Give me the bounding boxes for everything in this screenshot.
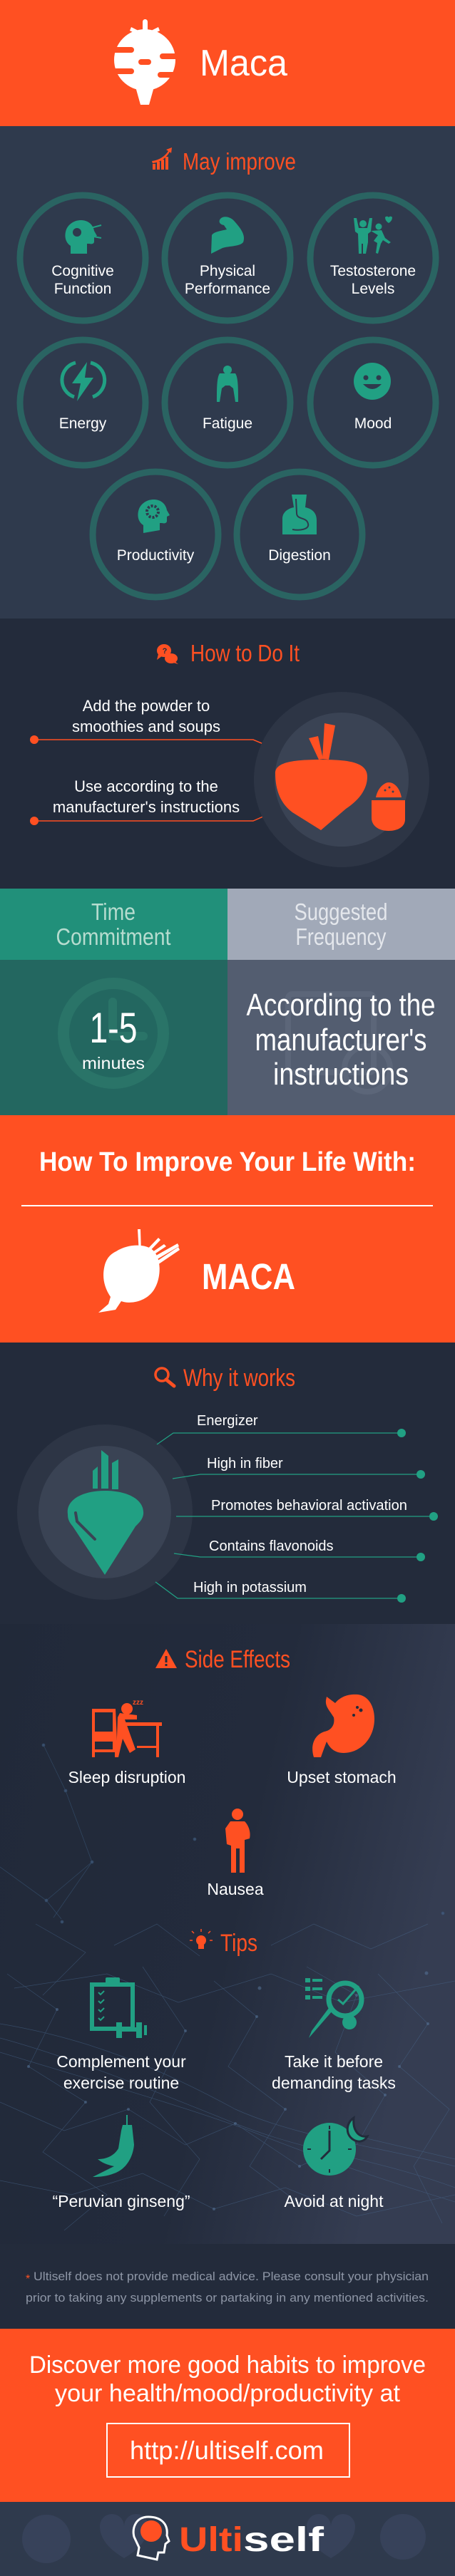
heading: may improve	[152, 148, 296, 175]
item: testosterone levels: Testosterone	[330, 263, 416, 279]
list: promotes behavioral activation: Promotes behavioral activation	[211, 1498, 407, 1514]
list: energizer	[157, 1413, 406, 1444]
panel: may improve	[0, 126, 455, 619]
panel: tips	[52, 1929, 396, 2210]
list: contains flavonoids: Contains flavonoids	[209, 1538, 334, 1554]
logo: ultiself	[133, 2517, 324, 2560]
icon: teal maca	[17, 1424, 193, 1600]
icon: sleep disruption: zzz	[133, 1699, 143, 1707]
heading: how to do it: How to Do It	[190, 640, 300, 666]
heading: tips: Tips	[220, 1930, 257, 1957]
label: upset stomach: Upset stomach	[287, 1768, 397, 1786]
disclaimer: *	[26, 2273, 30, 2285]
footer	[0, 2502, 455, 2576]
list: high in potassium	[155, 1580, 406, 1603]
label: complement: exercise routine	[63, 2074, 179, 2092]
item: productivity: Productivity	[117, 547, 195, 564]
disclaimer: Ultiself does not provide medical advice. Please consult your physician	[34, 2270, 429, 2283]
item: testosterone levels	[310, 195, 436, 321]
icon: clipboard	[90, 1977, 147, 2038]
panel: why it works	[0, 1343, 455, 1624]
value: 1-5 minutes: minutes	[82, 1054, 145, 1072]
heading: suggested frequency: Suggested	[294, 899, 388, 925]
label: peruvian ginseng: “Peruvian ginseng”	[52, 2192, 190, 2210]
item: fatigue: Fatigue	[203, 415, 252, 432]
list: promotes behavioral activation	[176, 1498, 438, 1521]
icon: calendar faint	[288, 994, 390, 1092]
item: physical performance: Physical	[200, 263, 255, 279]
title: Maca: Maca	[200, 43, 287, 84]
text: use according: Use according to the	[74, 777, 218, 795]
value: according	[247, 988, 435, 1092]
heading: why it works: Why it works	[183, 1365, 295, 1392]
item: physical performance	[165, 195, 290, 321]
button: url: http://ultiself.com	[130, 2436, 324, 2465]
disclaimer: prior to taking any supplements or partaking in any mentioned activities.	[26, 2292, 429, 2305]
item: cognitive function: Function	[54, 281, 111, 297]
list: energizer: Energizer	[197, 1413, 258, 1429]
label: take it before	[272, 2052, 396, 2092]
icon: magnifier checklist	[305, 1978, 362, 2038]
heading: how to improve: How To Improve Your Life With:	[39, 1147, 416, 1177]
item: productivity	[93, 472, 218, 597]
text: use according	[30, 777, 276, 825]
list: high in potassium: High in potassium	[193, 1580, 307, 1595]
heading: may improve: May improve	[183, 148, 296, 175]
text: discover more	[29, 2352, 426, 2407]
heading: how to do it: ?	[163, 647, 168, 656]
heading: tips	[190, 1929, 257, 1957]
panel: side effects and tips background	[0, 1624, 455, 2244]
value: according: instructions	[273, 1057, 409, 1092]
heading: how to do it	[157, 640, 300, 666]
panel: call to action	[0, 2329, 455, 2502]
panel: side effects	[68, 1646, 397, 1898]
list: contains flavonoids	[174, 1538, 425, 1561]
disclaimer	[0, 2244, 455, 2329]
heading: time commitment: Time	[91, 899, 136, 925]
list: high in fiber: High in fiber	[207, 1456, 283, 1471]
text: add the powder	[30, 697, 272, 748]
value: 1-5 minutes: 1-5	[90, 1004, 137, 1052]
icon: nausea	[225, 1809, 250, 1873]
list: high in fiber	[173, 1456, 425, 1479]
item: cognitive function	[20, 195, 145, 321]
panel: how to do it	[0, 619, 455, 889]
item: testosterone levels: Levels	[352, 281, 394, 297]
button: url	[107, 2424, 349, 2477]
icon: clock with moon	[303, 2118, 367, 2176]
item: fatigue	[165, 340, 290, 465]
icon: white beet	[98, 1229, 180, 1313]
icon: ginseng root	[93, 2115, 134, 2177]
heading: suggested frequency: Frequency	[295, 924, 387, 950]
label: take it before: Take it before	[285, 2052, 383, 2071]
item: digestion	[237, 472, 362, 597]
icon: maca header	[107, 19, 188, 105]
text: add the powder: Add the powder to	[83, 697, 210, 715]
heading: time commitment: Commitment	[56, 924, 171, 950]
icon: clock faint	[63, 983, 163, 1083]
label: complement: Complement your	[56, 2052, 186, 2071]
item: cognitive function: Cognitive	[51, 263, 114, 279]
label: complement	[56, 2052, 186, 2092]
item: physical performance: Performance	[185, 281, 270, 297]
item: energy	[20, 340, 145, 465]
logo: ultiself: Ulti	[179, 2521, 243, 2559]
label: sleep disruption: Sleep disruption	[68, 1768, 185, 1786]
logo: ultiself: self	[243, 2521, 324, 2559]
heading: side effects: Side Effects	[185, 1646, 290, 1673]
text: discover more: Discover more good habits to improve	[29, 2352, 426, 2379]
heading: time commitment	[56, 899, 171, 950]
item: mood	[310, 340, 436, 465]
panel: how to improve banner	[0, 1115, 455, 1343]
label: avoid at night: Avoid at night	[285, 2192, 384, 2210]
panel: time commitment	[0, 889, 228, 1115]
header band	[0, 0, 455, 126]
heading: why it works	[155, 1365, 295, 1392]
heading: side effects	[155, 1646, 290, 1673]
icon: sleep disruption	[92, 1699, 162, 1757]
icon: maca and powder	[254, 692, 429, 867]
item: energy: Energy	[59, 415, 107, 432]
icon: upset stomach	[312, 1695, 374, 1757]
heading: suggested frequency	[294, 899, 388, 950]
item: digestion: Digestion	[268, 547, 331, 564]
panel: suggested frequency	[228, 889, 455, 1115]
text: add the powder: smoothies and soups	[72, 718, 220, 735]
item: mood: Mood	[354, 415, 392, 432]
label: take it before: demanding tasks	[272, 2074, 396, 2092]
text: discover more: your health/mood/productivity at	[55, 2380, 401, 2407]
title: MACA: MACA	[202, 1256, 295, 1297]
text: use according: manufacturer's instructions	[53, 798, 240, 816]
value: 1-5 minutes	[82, 1004, 145, 1072]
label: nausea: Nausea	[207, 1880, 264, 1898]
